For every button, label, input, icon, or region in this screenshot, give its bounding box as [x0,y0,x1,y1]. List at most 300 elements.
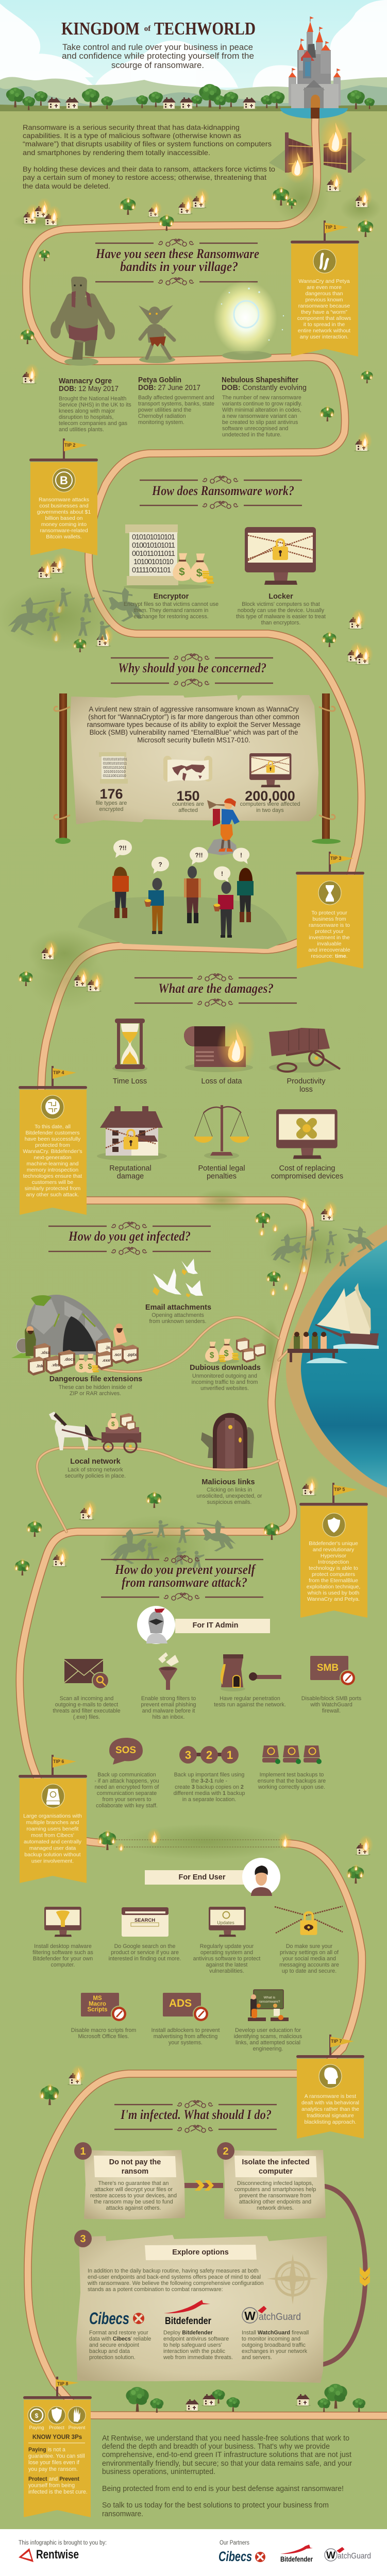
damage: legal scales [194,1105,249,1159]
tip: malware filter: filtering software such as [32,1950,93,1956]
label: encryptor: Encryptor [154,592,189,601]
partner: Bitdefender: web from immediate threats. [163,2354,233,2361]
stat: 150 countries: countries are [172,801,204,807]
tip: penetration tests [214,1654,286,1708]
banner: tip 8, know your 3Ps: KNOW YOUR 3Ps [32,2434,82,2441]
partner: Cibecs: Cibecs [89,2309,129,2328]
banner: tip 8, know your 3Ps: Protect [49,2425,64,2431]
closing text: ransomware. [102,2510,143,2518]
heading: prevention: How do you prevent yourself [114,1562,256,1577]
banner: tip 8, know your 3Ps: guarantee. You can still [28,2453,85,2460]
stat: 176 file types: file types are [96,800,127,806]
banner: tip 2: ransomware-related [40,528,88,534]
partner: WatchGuard: exchanges in your network [242,2348,308,2354]
profile: Petya Goblin: DOB: 27 June 2017 [138,384,200,392]
tip: disable SMB: SMB [317,1663,339,1673]
stat: 150 countries: affected [178,807,198,814]
tip: privacy settings: Do make sure your [286,1943,333,1950]
closing text: At Rentwise, we understand that you need hassle-free solutions that work to [102,2434,349,2443]
pier and vikings [288,1332,348,1363]
banner: tip 3 [296,852,364,969]
banner: tip 3: and irrecoverable [308,947,350,953]
stat: 176 file types: 010010101011 [103,762,127,766]
heading: what to do [114,2100,277,2132]
labels: damages row 2: damage [117,1173,144,1181]
illustration: encryptor scroll and money bags: 010010101011 [132,541,175,550]
email attachments label: Opening attachments [152,1312,204,1318]
illustration: encryptor scroll and money bags: 01111001101 [132,566,171,574]
banner: tip 8, know your 3Ps: lose your files even if [28,2460,79,2466]
partner: Bitdefender [163,2300,233,2361]
tip: email filters [141,1652,196,1720]
tip: email filters: hits an inbox. [153,1714,184,1720]
banner: tip 2: cost businesses and [39,503,89,509]
illustration: cave with vikings and crates: .exe [102,1358,110,1363]
banner: tip 6: Large organisations with [23,1813,82,1819]
banner: tip 5: WannaCry and Petya. [307,1596,360,1602]
tip: back up communication: collaborate with key staff. [96,1803,158,1809]
label: locker: this type of malware is easier to treat [236,614,326,620]
illustration: ogre [51,277,115,366]
closing text: So talk to us today for the best solutions to protect your business from [102,2501,329,2510]
tip: user education: engineering. [253,2046,283,2052]
tip: test backups: working correctly upon use. [258,1784,325,1790]
tip: regular updates: antivirus software to protect [193,1956,260,1962]
step 1: do not pay: the ransom may be used to fund [94,2199,173,2205]
illustration: encryptor scroll and money bags: 001011011011 [132,550,175,558]
local network label: Lack of strong network [68,1467,123,1473]
banner: tip 5: Introspection [318,1559,349,1565]
tip: scan emails: Scan all incoming and [60,1696,113,1702]
labels: damages row 1: Time Loss [113,1077,147,1086]
banner: tip 8, know your 3Ps: Paying is not a [28,2447,65,2453]
partner: WatchGuard: Install WatchGuard firewall [242,2330,309,2336]
partner: Cibecs: and secure endpoint [89,2342,139,2348]
banner: tip 6: most from Cibecs' [31,1832,74,1838]
speech bubbles: ?!! [119,844,127,852]
banner: tip 6: user involvement. [31,1858,74,1864]
heading: how it works: How does Ransomware work? [152,483,294,498]
profile: Nebulous Shapeshifter: be created to slip past antivirus [222,419,298,426]
banner: tip 4: To this date, all [35,1124,71,1130]
tip: regular updates: operating system and [200,1950,253,1956]
tip: test backups: ensure that the backups are [258,1778,326,1784]
step 2: isolate: computer [259,2167,293,2176]
banner: tip 4: similarly protected from [25,1185,81,1192]
profile: Nebulous Shapeshifter: DOB: Constantly evolving [222,384,307,392]
step 1: do not pay: attacker will decrypt your files or [94,2187,173,2193]
banner: tip 6: multiple branches and [26,1820,79,1826]
malicious links label: suspicious emails. [207,1499,251,1505]
profile: Wannacry Ogre: and utilities plants. [59,427,104,433]
tip: back up communication: SOS [115,1745,136,1756]
banner: tip 5 [299,1483,368,1618]
intro text [23,123,275,190]
illustration: encryptor scroll and money bags: 010101010101 [132,533,175,541]
tip: google search: Do Google search on the [114,1943,175,1950]
tip: back up communication: from your servers to [102,1797,152,1803]
banner: tip 7 [296,2035,364,2139]
banner: tip 4: any other such attack. [26,1192,79,1198]
branch paths to infection sources [37,1317,288,1532]
partner: Cibecs: backup and data [89,2348,130,2354]
partner: Bitdefender: endpoint antivirus software [163,2336,229,2342]
tip: email filters: Enable strong filters to [141,1696,196,1702]
profile: Nebulous Shapeshifter: With minimal alteration in codes, [222,407,301,413]
illustration: cave with vikings and crates [11,1295,139,1376]
castle with moat [280,16,348,118]
tip: google search: product or service if you are [111,1950,179,1956]
damage: replacing devices monitor [276,1109,338,1159]
profile: Petya Goblin: power utilities and the [138,407,191,413]
banner: tip 7: TIP 7 [331,2039,342,2044]
step 1: do not pay: 1 [80,2146,86,2157]
banner: tip 4 [19,1066,87,1215]
tip: 3-2-1 rule: in a separate location. [182,1797,236,1803]
banner: tip 4: have been successfully [25,1136,81,1142]
partner: Bitdefender: to help safeguard users' [163,2342,222,2348]
step 2: isolate: 2 [223,2146,229,2157]
subtitle: Take control and rule over your business in peace [62,42,253,52]
tip: back up communication: need an encrypted form of [95,1784,159,1790]
label: locker: Block victims' computers so that [242,601,320,607]
banner: tip 4: TIP 4 [53,1070,64,1075]
title [61,19,256,39]
profile: Petya Goblin: transport systems, banks, state [138,401,214,407]
burning village 1: houses and trees [13,172,374,2105]
malicious links label: unsolicited, unexpected, or [196,1493,262,1499]
partner: Bitdefender: Deploy Bitdefender [163,2330,213,2336]
parchment: WannaCry: Microsoft security bulletin MS17-010. [137,736,250,744]
banner: tip 8, know your 3Ps: Paying [29,2425,44,2431]
intro text: By holding these devices and their data to ransom, attackers force victims to [23,165,275,173]
banner: tip 5: and revolutionary [313,1547,355,1553]
banner: tip 7: A ransomware is best [305,2093,356,2099]
speech bubbles [113,840,249,883]
illustration: nebulous shapeshifter [213,281,284,360]
tip: 3-2-1 rule: Back up important files using [174,1772,244,1778]
illustration: encryptor scroll and money bags [124,524,214,589]
partner: WatchGuard: atchGuard [259,2312,301,2323]
banner: tip 7: analytics rather than the [301,2106,359,2112]
footer: Bitdefender [280,2555,313,2563]
stat: 200,000 computers [240,753,300,814]
partner: Cibecs [89,2309,151,2361]
intro text: “malware”) that disrupts usability of files or system functions on computers [23,140,272,148]
dubious downloads label: incoming traffic to and from [192,1379,258,1385]
stat: 176 file types: 010101010101 [103,758,127,761]
stat: 150 countries [163,756,212,814]
tip: back up communication: Back up communication [97,1772,156,1778]
local network label: Local network [70,1458,121,1466]
profile: Wannacry Ogre: DOB: 12 May 2017 [59,385,119,393]
intro text: capabilities. It is a type of malicious software (otherwise known as [23,131,241,140]
subtitle [62,42,254,70]
heading: why concerned: Why should you be concerned? [118,660,266,675]
tip: 3-2-1 rule: the 3-2-1 rule - [191,1778,227,1784]
banner: tip 3: resource: time. [311,953,348,959]
sky with clouds and hills [0,0,387,111]
email attachments label [145,1303,211,1325]
banner: tip 1: are even more [307,284,342,291]
label: encryptor [124,592,218,620]
partner: WatchGuard: and servers. [242,2354,272,2361]
profile: Nebulous Shapeshifter [222,376,307,438]
banner: tip 4: technologies ensure that [23,1173,82,1179]
banner: tip 4: customers will be [32,1179,73,1185]
villagers crowd [78,866,288,949]
banner: tip 8, know your 3Ps: TIP 8 [57,2381,68,2386]
labels: damages row 2: compromised devices [271,1173,343,1181]
damage: productivity loss cart [269,1028,340,1073]
tip: back up communication [94,1738,159,1809]
subtitle: scourge of ransomware. [111,60,204,70]
banner: tip 8, know your 3Ps: you pay the ransom. [28,2466,78,2472]
compass rose [267,2254,318,2304]
intro text: pay a certain sum of money to restore access; otherwise, threatening that [23,173,266,181]
banner: tip 3: ransomware is to [309,922,350,928]
speech bubbles: ? [158,861,162,868]
heading: damages [134,974,297,1006]
profile: Wannacry Ogre [59,377,131,433]
profile: Nebulous Shapeshifter: Nebulous Shapeshifter [222,376,298,384]
for IT admin badge: For IT Admin [193,1621,238,1630]
tip: ad blockers: your systems. [169,2040,203,2046]
footer [0,2529,387,2576]
banner: tip 2: Ransomware attacks [39,497,89,503]
tip: scan emails: outgoing e-mails to detect [55,1702,118,1708]
tip: regular updates: against the latest [206,1962,247,1968]
partner: Bitdefender: Bitdefender [165,2316,212,2327]
damage: time loss hourglass [112,1019,147,1072]
tip: google search: SEARCH [134,1918,155,1923]
stat: 176 file types: encrypted [99,806,124,812]
banner: tip 4: next-generation [34,1155,72,1161]
burning gate [269,116,366,183]
step 3: explore options parchment: In addition to the daily backup routine, having safety measures at both [88,2268,259,2274]
step 3: explore options parchment: end-user endpoints and back-end systems offers peace of mind to deal [88,2274,261,2280]
tip: regular updates: Updates [217,1920,234,1925]
footer: W [326,2550,335,2561]
banner: tip 4: WannaCry. Bitdefender's [23,1148,82,1155]
banner: tip 5: TIP 5 [334,1487,345,1492]
profile: Petya Goblin [138,376,214,426]
tip: regular updates [193,1907,260,1974]
footer: Cibecs [218,2549,252,2564]
tip: disable SMB: Disable/block SMB ports [301,1696,361,1702]
intro text: and smartphones by rendering them totally inaccessible. [23,148,210,157]
tip: malware filter: Install desktop malware [34,1943,92,1950]
tip: scan emails: (.exe) files. [73,1714,100,1720]
step 2: isolate: Isolate the infected [242,2158,310,2166]
damage: reputational house [97,1106,167,1161]
closing text: defend the depth and breadth of your business. That's why we provide [102,2443,330,2451]
banner: tip 6: TIP 6 [53,1759,64,1764]
profile: Wannacry Ogre: disruption to hospitals, [59,414,113,420]
banner: tip 3: business from [312,916,346,922]
illustration: horse and cart [49,1412,141,1452]
local network label [65,1458,126,1479]
footer: This infographic is brought to you by: [19,2540,107,2546]
for end user badge [145,1858,280,1896]
heading: how it works [140,476,302,509]
sea and beach [286,1225,387,1498]
tip: scan emails [53,1659,121,1720]
step 3: explore options parchment: stands as a potent combination to combat ransomware: [88,2286,223,2293]
tip: user education: links, and attempted social [235,2040,300,2046]
illustration: cave with vikings and crates: .scr [114,1352,121,1357]
burnt ground patches [13,173,381,1860]
profile: Nebulous Shapeshifter: software unrecognised and [222,426,288,432]
tip: macro scripts: Macro [89,2001,106,2007]
stat: 200,000 computers: computers were affected [240,801,300,807]
malicious links label: Malicious links [201,1478,255,1486]
illustration: cave with vikings and crates: .xlsx [41,1350,50,1355]
banner: tip 1: ransomware because [298,303,350,309]
dangerous file extensions label: ZIP or RAR archives. [70,1391,121,1397]
profile: Wannacry Ogre: telecom companies and gas [59,420,127,427]
label: encryptor: them. They demand ransom in [134,607,208,614]
dubious downloads label: Dubious downloads [190,1364,261,1372]
banner: tip 3: investment in the [309,935,350,941]
banner: tip 1: dangerous than [306,291,343,297]
closing text: Being protected from end to end is your best defense against ransomware! [102,2485,344,2493]
banner: tip 6: backup solution without [24,1852,81,1858]
closing text: business operations, uninterrupted. [102,2468,215,2476]
intro text: the data would be deleted. [23,182,110,190]
illustration: cave with vikings and crates: .lnk [36,1364,43,1368]
step 2: isolate: prevent the ransomware from [239,2193,311,2199]
stat: 176 file types [96,752,128,812]
step 2: isolate: attacking other endpoints and [239,2199,311,2205]
partner: WatchGuard: W [244,2309,256,2323]
banner: tip 1: component that allows [297,315,351,321]
tip: malware filter [32,1907,93,1968]
banner: tip 1: any user interaction. [300,334,348,340]
parchment: WannaCry: ransomware types because of its ability to exploit the Server Message [87,721,300,728]
tip: macro scripts: Microsoft Office files. [78,2033,129,2040]
dubious downloads illustration [204,1337,266,1364]
labels: damages row 2: Cost of replacing [279,1164,335,1173]
illustration: cave with vikings and crates: .vbs [52,1363,60,1367]
step 3: explore options parchment: 3 [80,2233,86,2245]
step 2: isolate [217,2142,326,2219]
illustration: goblin [139,305,175,363]
malicious links label: Clicking on links in [207,1487,252,1493]
illustration: encryptor scroll and money bags: 10100101010 [133,558,174,566]
tip: 3-2-1 rule: 2 [206,1749,212,1761]
profile: Petya Goblin: monitoring system. [138,419,184,426]
ship [315,1283,379,1349]
heading: infected [48,1222,211,1255]
tip: privacy settings: messaging accounts are [279,1962,339,1968]
banner: tip 5: exploitation technique, [307,1584,360,1590]
tip: malware filter: Bitdefender for your own [33,1956,93,1962]
step 1: do not pay: Do not pay the [109,2158,161,2166]
tip: google search [109,1907,181,1962]
banner: tip 5: Bitdefender's unique [309,1540,358,1547]
partner: Cibecs: Format and restore your [89,2330,148,2336]
label: locker: than encryptors. [261,620,300,626]
step 3: explore options parchment: Explore options [172,2248,229,2257]
tip: scan emails: threats and filter executable [53,1708,121,1714]
dubious downloads label: Unmonitored outgoing and [192,1373,257,1379]
tip: ad blockers [151,1993,220,2046]
partner: Cibecs: data with Cibecs' reliable [89,2336,151,2342]
banner: tip 8, know your 3Ps: $ [35,2412,39,2419]
tip: test backups [258,1745,326,1790]
profile: Nebulous Shapeshifter: a new ransomware variant can [222,413,297,419]
dangerous file extensions label [49,1375,142,1397]
tip: privacy settings: privacy settings on all of [280,1950,339,1956]
step 3: explore options parchment: with ransomware. We believe the following comprehensive configuration [87,2280,263,2286]
stat: 176 file types: 011110011010 [103,774,126,778]
labels: damages row 2 [109,1164,343,1181]
tip: user education: ransomware? [259,2000,280,2004]
for IT admin badge [137,1606,270,1644]
tip: 3-2-1 rule [174,1746,245,1803]
tip: 3-2-1 rule: 3 [185,1749,191,1761]
labels: damages row 1: Productivity [287,1077,326,1086]
tip: back up communication: communication separate [97,1790,157,1797]
tip: macro scripts [71,1993,136,2040]
banner: tip 5: protect computers [312,1571,355,1578]
profile: Nebulous Shapeshifter: The number of new ransomware [222,395,301,401]
heading: bandits [95,239,259,285]
partner: Bitdefender: interaction with the public [163,2348,226,2354]
tip: ad blockers: ADS [169,1997,192,2009]
banner: tip 6 [19,1755,87,1883]
parchment: WannaCry: (short for “WannaCryptor”) is far more dangerous than other common [88,713,299,721]
tip: email filters: prevent email phishing [141,1702,196,1708]
banner: tip 5: from the EternalBlue [309,1578,358,1584]
tip: privacy settings: up to date and secure. [282,1968,336,1974]
heading: infected: How do you get infected? [68,1229,191,1244]
illustration: locker monitor [245,527,316,585]
illustration: doves [153,1259,203,1297]
title: of [144,25,151,33]
tip: macro scripts: Disable macro scripts from [71,2027,136,2033]
damage: loss of data chest [184,1021,256,1073]
heading: why concerned [111,654,273,686]
label: locker: nobody can use the device. Usually [238,607,325,614]
profile: Wannacry Ogre: knees along with major [59,408,115,414]
heading: prevention [101,1555,263,1600]
title: TECHWORLD [154,19,256,39]
profile: Nebulous Shapeshifter: undetected in the future. [222,432,281,438]
dubious downloads label [190,1364,261,1392]
footer: atchGuard [338,2552,371,2561]
step 1: do not pay: There's no guarantee that an [98,2180,169,2187]
tip: ad blockers: Install adblockers to prevent [151,2027,220,2033]
subtitle: and confidence while protecting yourself from the [62,51,254,61]
healthy village [126,2384,365,2413]
banner: tip 2: governments about $1 [37,509,91,515]
dubious downloads label: unverified websites. [200,1385,249,1392]
labels: damages row 1: Loss of data [201,1077,242,1086]
profile: Wannacry Ogre: Brought the National Health [59,396,126,402]
label: encryptor: exchange for restoring access. [133,614,209,620]
closing text: comprehensive, end-to-end green IT infrastructure solutions that are not just [102,2451,351,2459]
tip: 3-2-1 rule: create 3 backup copies on 2 [175,1784,244,1790]
step 1: do not pay: ransom [122,2167,148,2176]
banner: tip 3: TIP 3 [330,856,341,861]
step 3: explore options parchment [74,2230,327,2383]
parchment: WannaCry: Block (SMB) vulnerability named “EternalBlue” which was part of the [90,728,298,736]
banner: tip 6: managed user data [29,1845,76,1852]
labels: damages row 2: Potential legal [198,1164,245,1173]
footer: Our Partners [220,2540,249,2546]
